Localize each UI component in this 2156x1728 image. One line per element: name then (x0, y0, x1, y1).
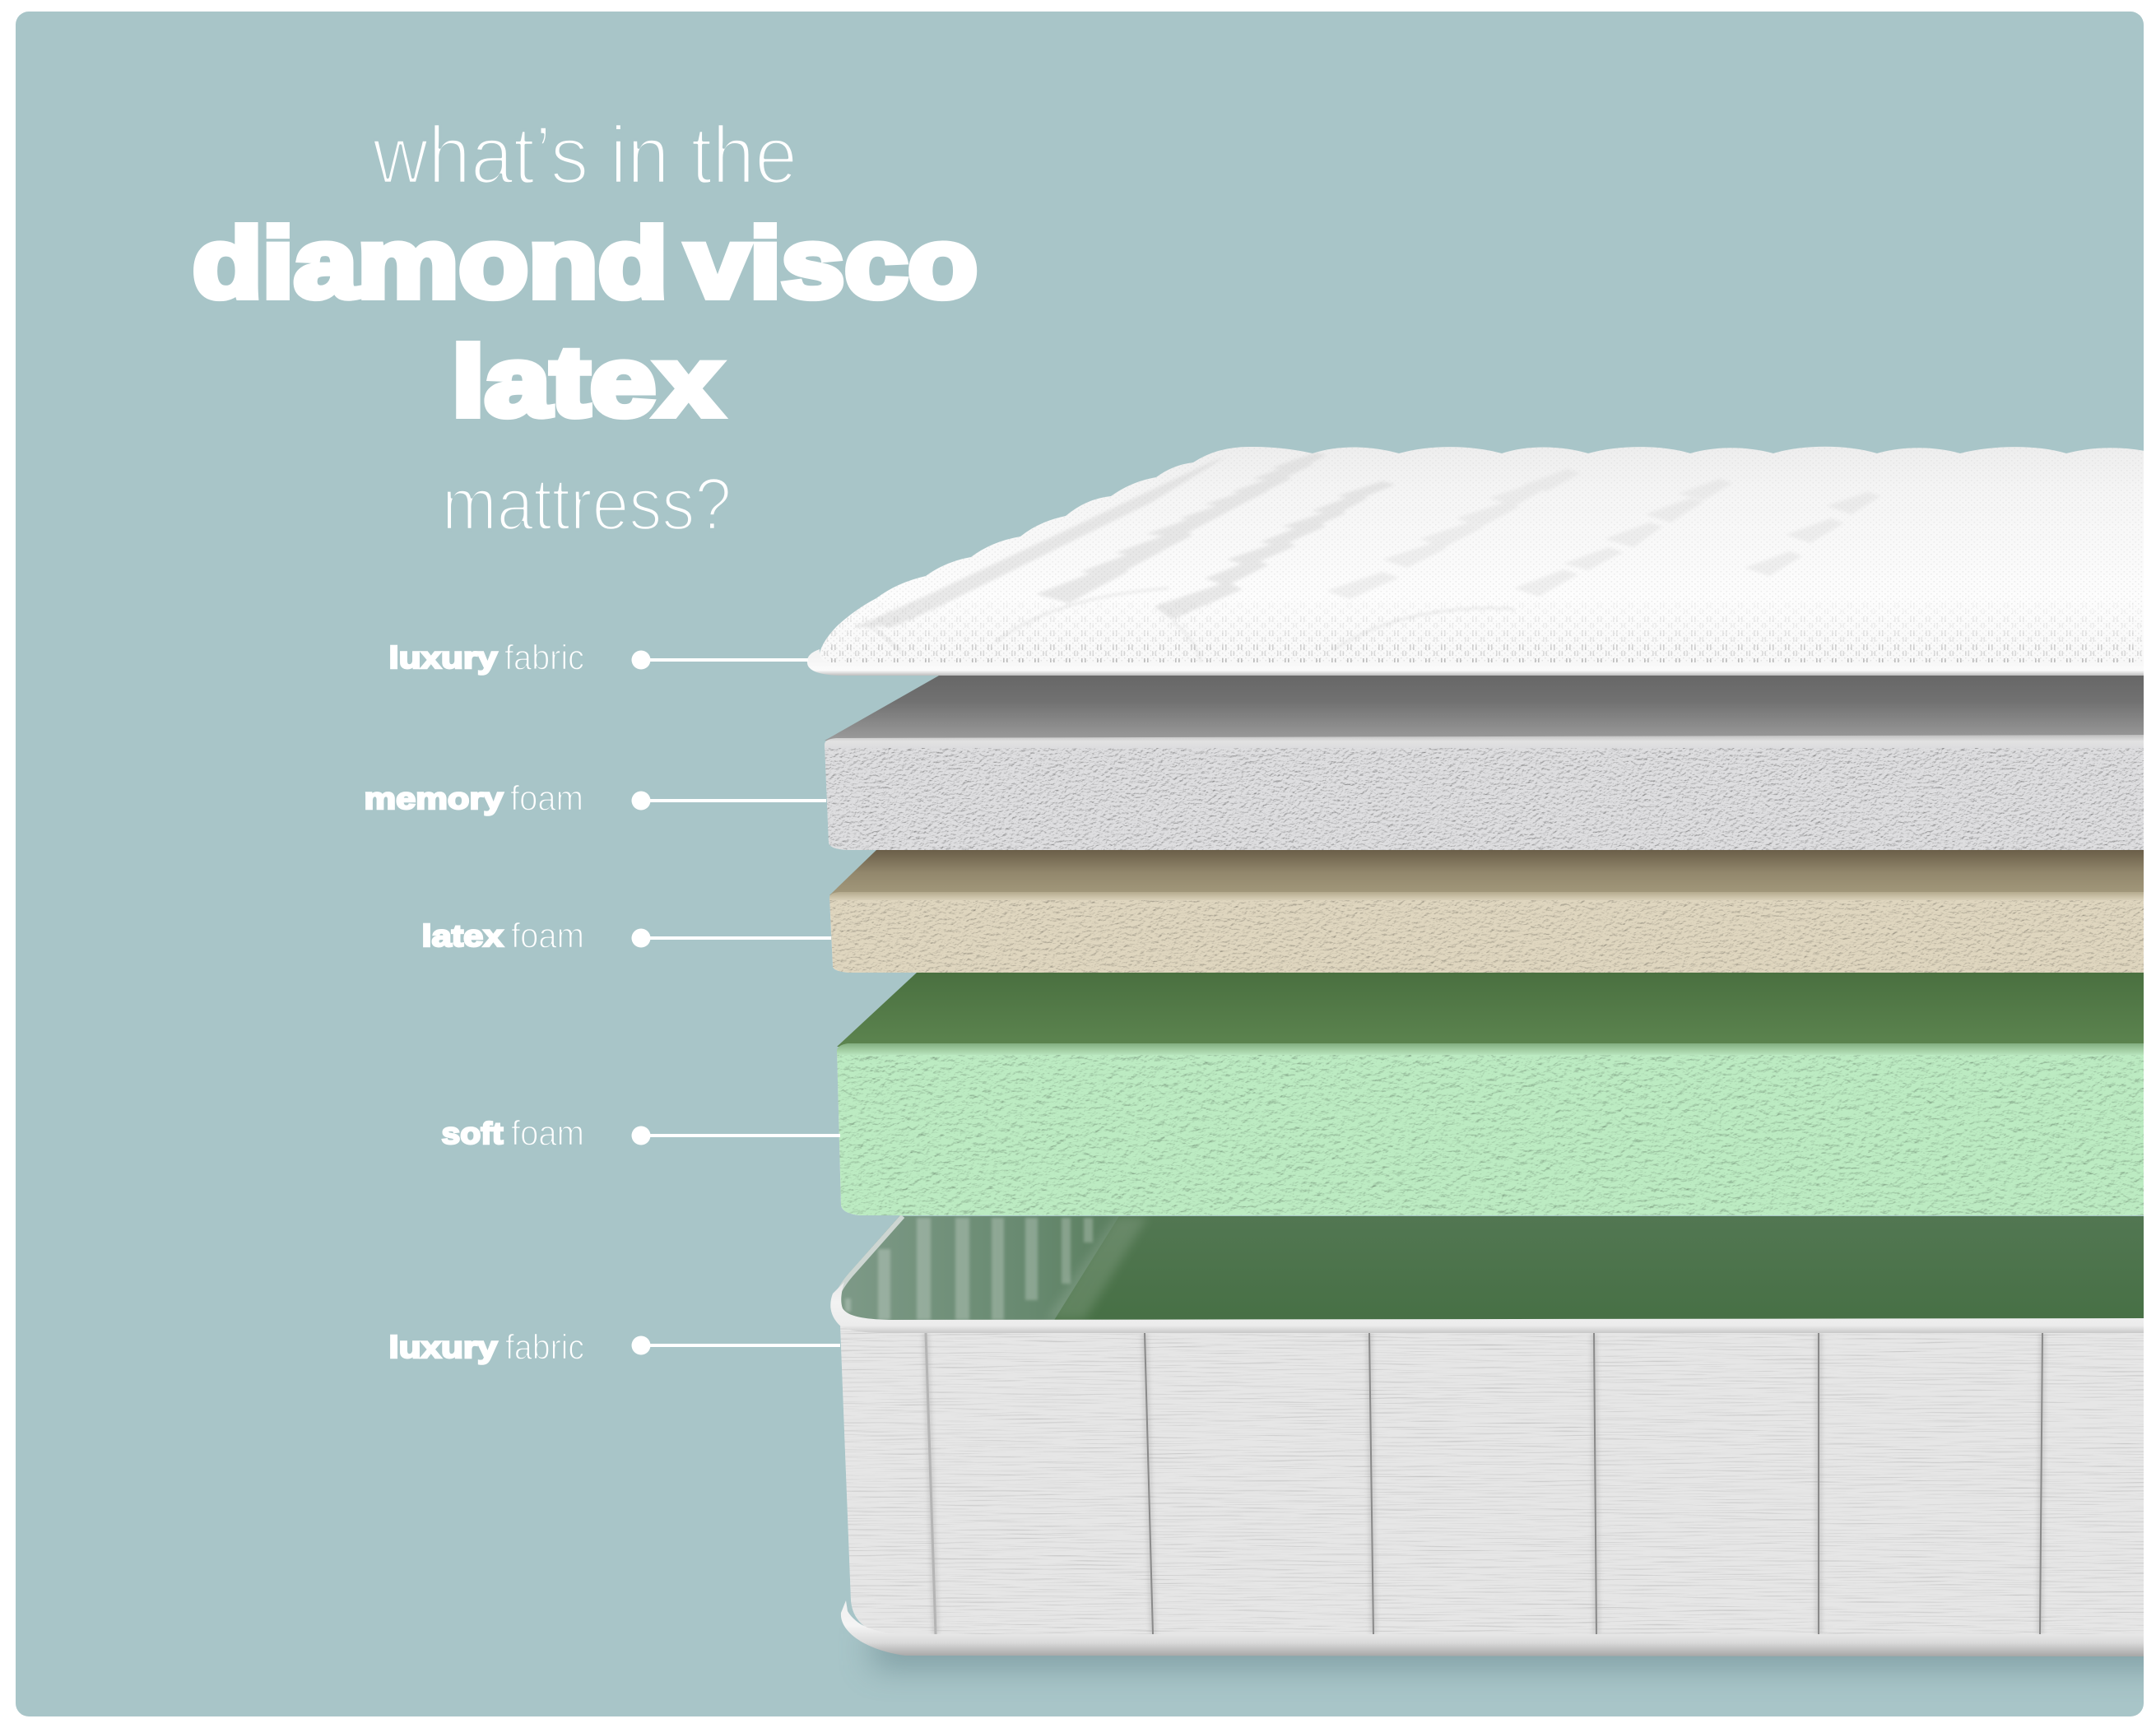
topper quilted body (790, 436, 2156, 667)
leader: luxury fabric (top) (632, 650, 808, 670)
fabric mesh texture (790, 436, 2156, 667)
leader: latex foam (632, 928, 831, 948)
soft foam top edge (837, 1043, 2156, 1055)
label: luxury fabric (base): fabric (505, 1328, 584, 1368)
floor shadow (872, 1633, 2156, 1666)
label: soft foam: foam (511, 1114, 584, 1154)
latex top edge (829, 892, 2156, 900)
label: luxury fabric (top): luxury (388, 641, 498, 675)
label: soft foam (441, 1114, 584, 1154)
leader: soft foam (632, 1126, 840, 1145)
base bottom rim (841, 1600, 2156, 1656)
label: latex foam: foam (511, 917, 584, 956)
layer: soft foam (green) (837, 973, 2156, 1215)
quilting recesses, far row (1327, 469, 1880, 599)
memory side (825, 744, 2156, 850)
topper rim (807, 649, 2156, 676)
puffed panel arcs (856, 588, 1514, 663)
memory top (825, 676, 2156, 741)
front dash texture (790, 592, 2156, 663)
quilting recesses (859, 453, 1395, 627)
latex side (829, 897, 2156, 973)
base side seams (926, 1333, 2042, 1634)
label: memory foam (364, 778, 583, 818)
label: latex foam (421, 917, 584, 956)
mattress illustration (790, 436, 2156, 1666)
title (193, 109, 978, 546)
label: luxury fabric (top): fabric (504, 639, 584, 678)
title line: mattress?: mattress? (442, 464, 732, 546)
memory top edge (825, 735, 2156, 748)
latex top (829, 850, 2156, 895)
layer: base mattress with luxury fabric (830, 1216, 2156, 1656)
layer: latex foam (beige) (829, 850, 2156, 973)
title line: what's in the: what’s in the (372, 109, 797, 201)
label: soft foam: soft (441, 1117, 504, 1150)
label: luxury fabric (base) (388, 1328, 584, 1368)
title line: diamond visco: diamond visco (193, 208, 978, 318)
label: memory foam: foam (510, 778, 583, 818)
label: memory foam: memory (364, 782, 504, 815)
layer: quilted luxury fabric topper (790, 436, 2156, 676)
leader: luxury fabric (base) (632, 1336, 840, 1354)
label: latex foam: latex (421, 919, 504, 953)
layer: memory foam (grey) (825, 676, 2156, 850)
soft foam side (837, 1050, 2156, 1215)
base inner glass sheen (833, 1216, 1148, 1322)
base top rim (830, 1282, 2156, 1333)
base fabric side (840, 1325, 2156, 1636)
leader: memory foam (632, 792, 826, 810)
base inner cavity (834, 1216, 2156, 1322)
label: luxury fabric (top) (388, 639, 584, 678)
title line: latex: latex (452, 327, 722, 437)
label: luxury fabric (base): luxury (388, 1331, 498, 1364)
soft foam top (837, 973, 2156, 1047)
